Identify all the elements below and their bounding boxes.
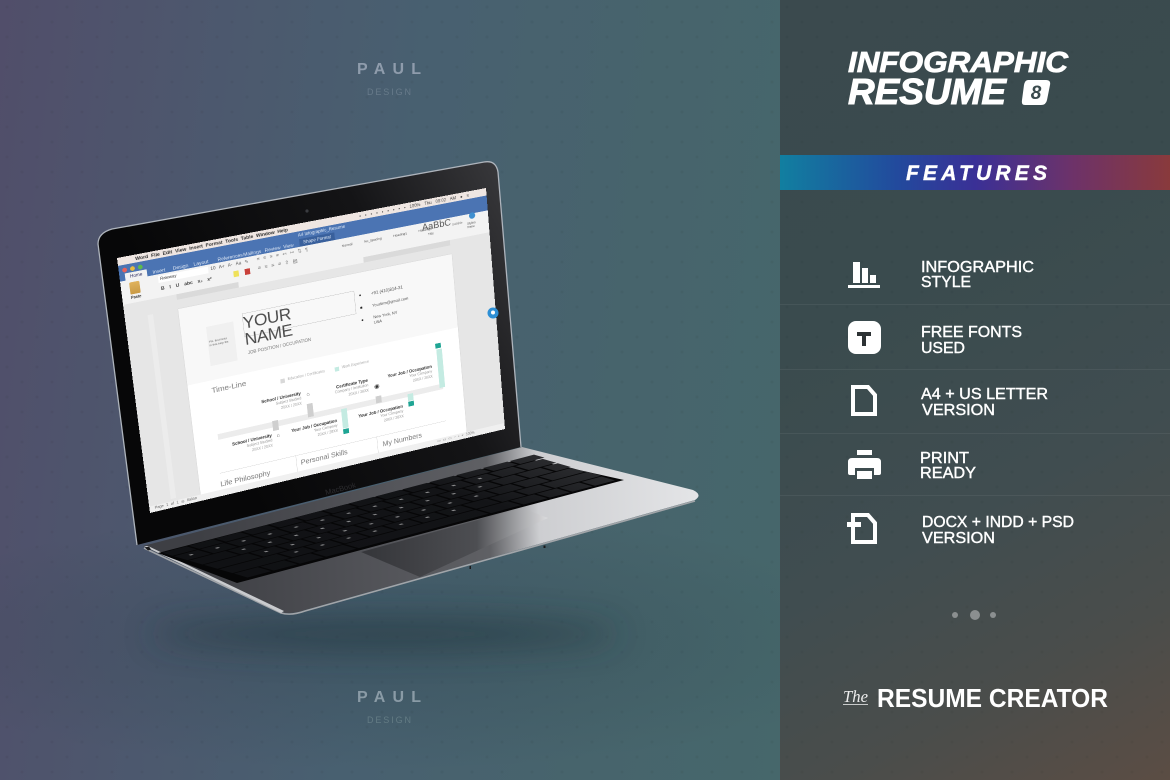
laptop screen: word document: Work Experience [342,360,369,369]
menu items: Help [277,227,288,234]
doc title: A4 Infographic_Resume [298,224,345,238]
label: VERSION [922,402,995,419]
panel: left background [0,0,780,780]
timeline icons [343,428,349,434]
job position: JOB POSITION / OCCUPATION [248,337,311,355]
laptop illustration [97,161,698,655]
font controls: Raleway [160,273,177,281]
label: READY [920,465,976,482]
laptop screen: word document: 20XX / 20XX [317,429,338,437]
left silver lip [144,546,284,613]
pagination dots [952,610,996,620]
laptop screen: word document: ■ [360,305,363,310]
laptop screen: word document: 20XX / 20XX [281,402,302,410]
laptop screen: word document: ⌂ [276,432,280,438]
laptop screen: word document: Personal Skills [300,448,348,467]
laptop screen: word document: Page 1 of 1 ◎ Italian [155,496,197,510]
laptop screen: word document: Design [172,262,189,271]
title: INFOGRAPHIC [848,47,1069,79]
trackpad [361,508,548,577]
ribbon [120,210,489,305]
watermark: bottom: PAUL [357,689,421,706]
home tab: Home [130,271,143,279]
timeline ticks [272,420,279,431]
logo: the resume creator: RESUME CREATOR [877,683,1108,713]
menu items [135,227,288,261]
watermark: top: PAUL [357,61,421,78]
menu items: Format [205,239,223,248]
section headings: Life Philosophy [220,469,271,488]
keyboard keys [162,455,620,577]
page [178,254,467,499]
timeline entry: job one: Your Job / Occupation [291,418,337,433]
section rule [220,421,446,473]
laptop screen: word document: Your Company [409,370,432,378]
front edge [144,501,695,614]
contact details: ● [359,293,361,298]
key legends [188,478,528,568]
laptop screen: word document: Subject Studied [246,438,273,448]
laptop screen: word document: USA [374,319,382,325]
feature: infographic style [848,259,1034,291]
laptop screen: word document: Shape Format [303,234,331,245]
features band: FEATURES [906,162,1047,185]
laptop screen: word document: View [283,242,294,250]
laptop screen: word document: +91 (410)814-31 [371,285,403,296]
laptop screen: word document [117,188,505,513]
paragraph controls: ≡ ≡ ≡ ≡ ↤ ↦ ⇅ ¶ [256,246,308,262]
label: VERSION [922,530,995,547]
font controls [158,267,209,283]
laptop screen: word document: Your Company [380,409,404,418]
vertical ruler [148,314,176,499]
icon: bar chart [848,262,880,288]
ribbon tabs: Insert [152,267,166,275]
feature: free fonts [848,321,1022,357]
title [848,47,1069,112]
menu items: View [175,246,187,254]
laptop screen: word document: Pane [467,224,475,229]
laptop screen: word document: Title [428,231,434,236]
laptop screen: word document: Styles [467,220,476,225]
watermark: top: DESIGN [367,87,411,97]
watermark: bottom [357,689,421,725]
timeline entry: school upper: School / University [261,391,301,404]
lid rim [98,162,521,545]
laptop screen: word document: Yourfirm@gmail.com [372,296,408,308]
icon: document plus [853,515,875,542]
paste icon [129,281,141,295]
title bar [118,195,488,282]
laptop screen: word document: References [217,252,243,262]
features band [780,155,1170,190]
laptop screen: word document: My Numbers [382,431,422,448]
style gallery: Normal No_Spacing Heading1 Heading2 [342,227,432,248]
timeline heading: Time-Line [211,379,247,395]
laptop screen: word document: Company / Institution [335,383,369,395]
name selection box [242,291,356,337]
port and edge notches [145,546,546,569]
label: A4 + US LETTER [921,386,1048,403]
laptop screen: word document: Subtitle [452,221,463,226]
laptop screen: word document: Review [264,245,281,253]
label: PRINT [920,450,970,467]
laptop screen: word document: Your Company [314,424,338,433]
label [922,514,1074,547]
label [921,386,1048,419]
icon: floating blue badge [488,308,498,318]
feature: print ready [848,450,976,482]
feature: docx indd psd [847,514,1074,547]
name text: NAME [244,320,293,349]
menu bar [117,188,487,266]
label [920,450,976,482]
laptop screen: word document: New York, NY [373,310,398,320]
watermark: top [357,61,421,97]
menu items: Window [256,229,275,238]
laptop screen: word document: Paste [131,294,142,300]
title: RESUME [848,71,1007,112]
laptop screen: word document: ◉ [374,382,380,390]
laptop screen: word document: Mailings [243,248,261,257]
label [921,259,1034,291]
watermark: bottom: DESIGN [367,715,411,725]
photo placeholder [206,321,238,366]
laptop screen: word document: Subject Studied [276,396,301,406]
laptop screen: word document: Education / Certificates [288,369,325,381]
badge: number 8: 8 [1031,83,1042,104]
name text: YOUR [242,304,292,333]
laptop screen: word document: 20XX / 20XX [348,389,369,397]
styles pane icon [469,212,475,219]
laptop screen: word document: ≡ ≡ ≡ ≡ ⇳ ▤ [257,257,298,271]
laptop screen: word document: ⌂ [306,391,310,397]
laptop lid [98,162,521,545]
laptop screen: word document: 20XX / 20XX [252,444,273,452]
label: STYLE [921,274,971,291]
feature: a4 and us letter [853,386,1048,419]
logo: the resume creator: The [843,687,868,706]
header band [178,254,458,386]
laptop screen: word document: Layout [193,259,209,267]
laptop screen: word document: 10 A+ A- Aa ✎ [210,259,249,271]
panel: right background [780,0,1170,780]
label: DOCX + INDD + PSD [922,514,1074,531]
legend [280,378,285,384]
badge: number 8 [1022,80,1050,105]
laptop screen: word document: 20XX / 20XX [413,375,433,383]
menu items: Edit [162,249,172,256]
timeline entry: certificate: Certificate Type [336,378,368,390]
menu items: Table [240,233,254,241]
menu status: ▪ ▪ ▪ ▪ ▪ ▪ ▪ ▪ ▪ 100% Thu 09:02 AM ● ≡ [359,193,469,219]
home tab [125,269,148,281]
horizontal ruler [176,240,450,300]
camera [305,209,309,213]
menu items: Word [135,253,148,261]
shadow [150,619,620,649]
laptop screen: word document: ▭ ▭ ▭ − ▪ + 100% [437,431,475,443]
laptop base [143,447,699,614]
name text [242,304,293,349]
label: USED [921,340,965,357]
icon: printer [848,450,881,479]
laptop screen: word document: 20XX / 20XX [384,414,404,423]
icon: T square [848,321,881,354]
highlight swatches [233,270,239,277]
laptop screen: word document: B I U abc x₂ x² [161,276,212,291]
menu items: Tools [225,236,238,244]
menu items: Insert [189,243,203,251]
label: FREE FONTS [921,324,1022,341]
label: INFOGRAPHIC [921,259,1034,276]
laptop screen: word document: Pls. find fonts [209,336,227,343]
timeline entry: job three: Your Job / Occupation [387,364,432,379]
timeline entry: school lower: School / University [232,433,272,447]
keyboard well [158,458,624,583]
menu items: File [151,251,160,258]
laptop screen: word document: ● [361,318,364,323]
icon: document [853,387,875,414]
feature dividers [780,304,1170,496]
label [921,324,1022,357]
laptop screen: word document: in this help file [209,340,229,347]
timeline entry: job two: Your Job / Occupation [358,404,403,419]
window dots [122,264,143,273]
status bar [149,423,505,513]
laptop screen: word document: AaBbC [422,217,451,233]
MacBook label: MacBook [324,480,357,497]
timeline band [218,384,443,440]
